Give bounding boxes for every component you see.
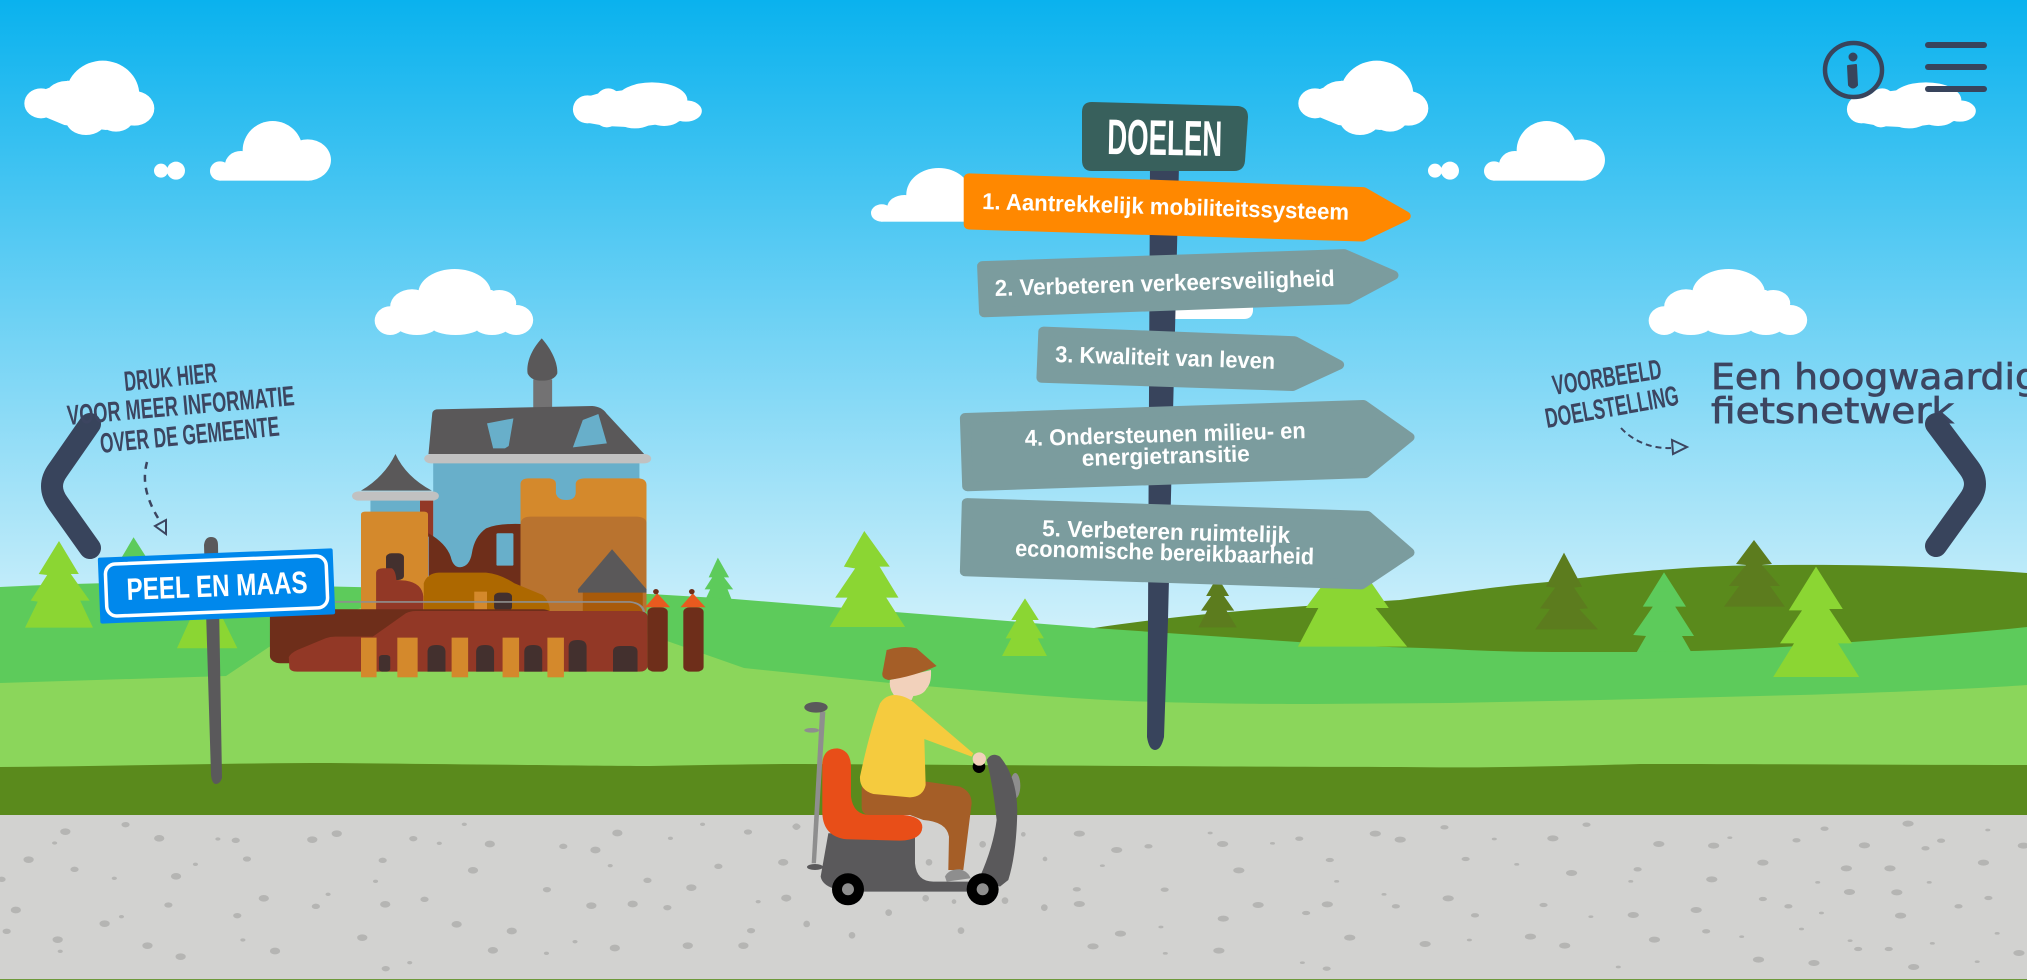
cloud top left [24, 61, 154, 135]
road pebbles [2, 824, 2023, 969]
tree bright behind sign [177, 567, 237, 648]
bright trees on hill [25, 531, 1859, 677]
hint line 2: VOOR MEER INFORMATIE [66, 380, 296, 431]
front wheel [967, 873, 999, 905]
castle brown arcade [420, 500, 521, 590]
scooter rear pole [804, 702, 828, 870]
tree dark 1 [1535, 553, 1598, 629]
scooter light [1010, 773, 1020, 798]
arrow sign 5 text [1015, 515, 1314, 569]
cloud right [1649, 269, 1807, 335]
tree bright middle [830, 531, 905, 627]
arrow sign 2 [982, 254, 1393, 312]
icon: hamburger menu [1928, 45, 1984, 89]
castle base dark [270, 609, 553, 663]
person shirt [860, 695, 973, 797]
label line 1: VOORBEELD [1550, 353, 1664, 401]
icon: info [1825, 43, 1882, 97]
arrow sign 4 text: energietransitie [1081, 440, 1250, 471]
tree bright behind signs [1298, 550, 1407, 647]
arrow sign 4 [965, 405, 1409, 486]
tree green right [1633, 572, 1694, 653]
arrow sign 4 text [1024, 417, 1306, 471]
scooter body [821, 833, 980, 892]
castle main roof [424, 406, 651, 463]
dashed arrow to objective [1621, 428, 1687, 454]
green trees behind hill [113, 537, 1694, 653]
person head [890, 670, 931, 700]
arrow sign 1 text: 1. Aantrekkelijk mobiliteitssysteem [982, 188, 1349, 225]
front hill light green [0, 570, 2027, 790]
handle grip [973, 760, 985, 773]
scooter steering column [980, 755, 1017, 887]
person hand [973, 752, 986, 766]
municipality hint text [66, 357, 296, 459]
clouds [24, 61, 1976, 335]
example objective label [1543, 353, 1681, 434]
tree dark 2 [1724, 540, 1785, 607]
tree green behind sign [113, 537, 156, 583]
tree green small near castle [704, 558, 733, 603]
castle small grey roof [578, 549, 647, 612]
far hill dark green [1094, 565, 2027, 720]
road [0, 815, 2027, 979]
left navigation chevron [52, 424, 90, 548]
title line 1: Een hoogwaardig [1711, 357, 2027, 398]
cloud puffs right [1428, 162, 1459, 180]
arrow sign 3 text: 3. Kwaliteit van leven [1055, 341, 1276, 374]
person on mobility scooter [804, 647, 1020, 905]
cloud behind first sign [871, 168, 1002, 222]
tree bright small [1002, 598, 1047, 656]
castle blue wall [433, 462, 639, 582]
DOELEN header plate [1082, 102, 1248, 171]
tree dark 3 [1198, 577, 1237, 627]
tree bright left [25, 541, 93, 628]
cloud puffs left [154, 162, 185, 180]
arrow sign 1 active [969, 178, 1405, 237]
title line 2: fietsnetwerk [1711, 391, 1954, 432]
hint line 1: DRUK HIER [123, 357, 218, 397]
foreground grass band [0, 763, 2027, 820]
tree bright right [1773, 567, 1859, 677]
DOELEN heading: DOELEN [1107, 109, 1223, 167]
cloud top right of sign [1298, 61, 1428, 135]
cloud top middle left [573, 82, 702, 128]
person shoe [945, 869, 971, 882]
sign post [204, 537, 222, 784]
castle [270, 338, 705, 677]
arrow sign 5 text: 5. Verbeteren ruimtelijk [1042, 515, 1291, 548]
castle spire [527, 338, 557, 409]
scooter seat [822, 748, 922, 841]
dark trees on far hill [1198, 540, 1785, 629]
castle gold wing [424, 573, 550, 612]
castle orange pillars [361, 638, 564, 677]
sign text: PEEL EN MAAS [126, 565, 308, 607]
cloud behind second sign [1175, 300, 1253, 319]
hint line 3: OVER DE GEMEENTE [99, 411, 281, 459]
arrow sign 2 text: 2. Verbeteren verkeersveiligheid [994, 265, 1335, 301]
arrow sign 5 text: economische bereikbaarheid [1015, 535, 1314, 569]
rear wheel [832, 873, 864, 905]
signpost with goals [965, 102, 1409, 750]
cloud small left [210, 121, 331, 181]
place name sign [98, 537, 335, 784]
cloud behind menu [1847, 82, 1976, 128]
castle base brick [289, 611, 647, 672]
main post [1147, 165, 1179, 750]
arrow sign 5 [965, 503, 1409, 585]
blue sign plate [98, 548, 335, 624]
castle gate columns [645, 589, 705, 672]
label line 2: DOELSTELLING [1543, 380, 1681, 434]
cloud right of sign [1484, 121, 1605, 181]
arrow sign 3 [1042, 331, 1339, 386]
cloud above castle [375, 269, 533, 335]
middle hill green [0, 583, 2027, 770]
right navigation chevron [1936, 424, 1975, 546]
castle small tower left [352, 454, 439, 612]
person hat [882, 647, 937, 680]
arrow sign 4 text: 4. Ondersteunen milieu- en [1024, 417, 1306, 451]
castle dark windows [379, 640, 638, 672]
person legs [862, 782, 972, 870]
castle orange tower right [521, 478, 647, 612]
dashed arrow to place sign [145, 462, 166, 534]
castle wire fence [335, 602, 644, 613]
objective title [1711, 357, 2027, 432]
